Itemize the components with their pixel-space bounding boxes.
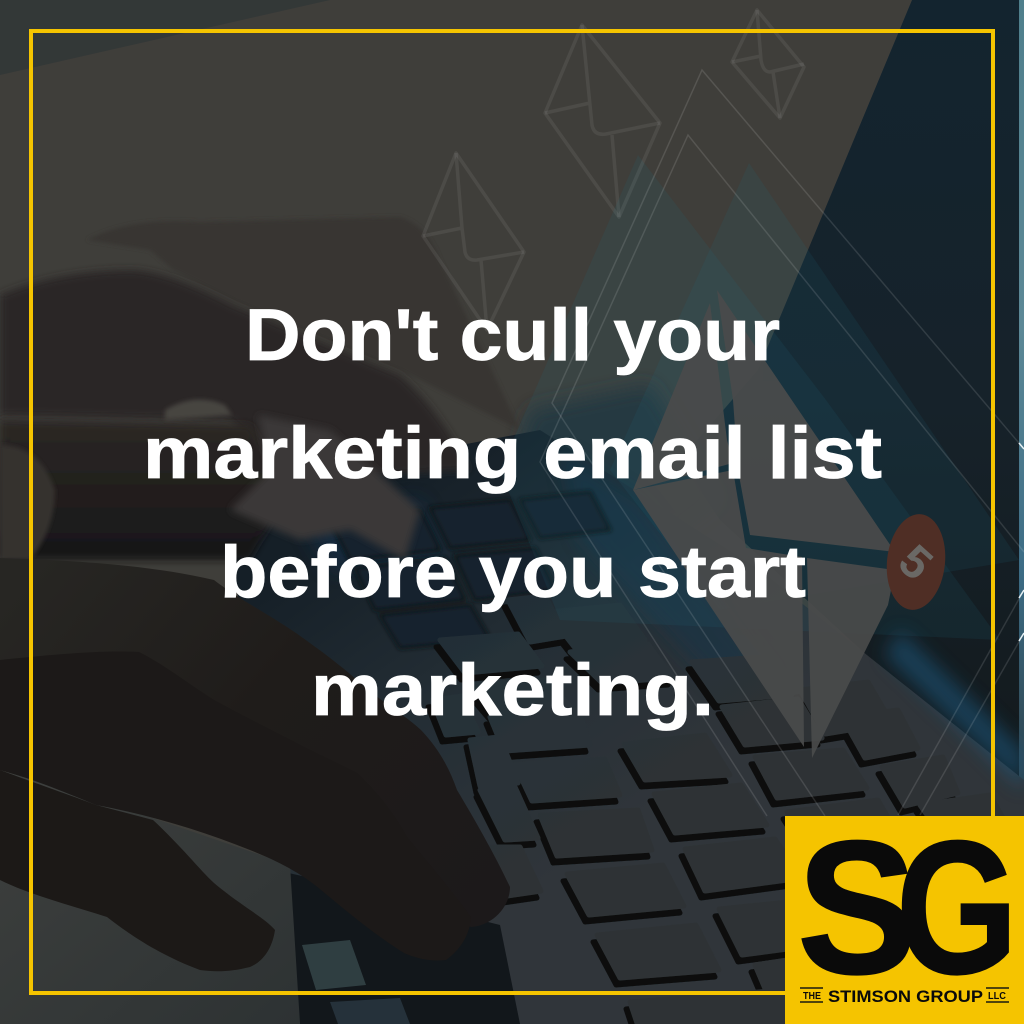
badge number: 5 — [889, 534, 943, 590]
hand: third finger — [0, 770, 275, 971]
background: right edge strip — [1019, 0, 1024, 816]
knuckle highlight — [165, 400, 232, 420]
white strip glints — [1019, 443, 1024, 641]
hand: first finger — [0, 558, 510, 927]
headline line 3: before you start — [220, 532, 806, 613]
upper dim keys — [330, 492, 610, 648]
hand back brown — [0, 270, 470, 480]
teal triangle left — [500, 155, 1000, 640]
keyboard deck — [225, 430, 1024, 1024]
logo monogram — [797, 802, 1018, 1014]
wordmark THE: THE — [803, 991, 821, 1002]
blue keyboard glow — [300, 450, 1024, 790]
headline — [143, 295, 882, 731]
logo rule lines — [800, 988, 1009, 1002]
large grey envelope — [633, 290, 895, 758]
envelope outline right — [732, 10, 804, 118]
wordmark name: STIMSON GROUP — [828, 987, 983, 1006]
inner outline — [540, 135, 1024, 816]
background: top left navy corner — [0, 0, 330, 75]
logo wordmark — [803, 987, 1006, 1006]
outline envelopes — [423, 10, 804, 330]
lower left desk surface — [0, 770, 300, 1024]
keyboard keys — [432, 596, 1010, 1024]
outer outline — [552, 70, 1024, 816]
keyboard photo — [225, 430, 1024, 1024]
envelope lower right body — [807, 558, 895, 758]
hand upper band — [87, 217, 520, 430]
monogram S: S — [797, 802, 917, 1014]
hand: second finger — [0, 652, 471, 961]
hand lower dark — [0, 420, 290, 560]
background: dark patch behind text — [500, 385, 720, 560]
lower right lines — [898, 590, 1024, 815]
thumb lump — [0, 445, 55, 560]
logo background — [785, 816, 1024, 1024]
graphic: teal triangles — [500, 155, 1019, 640]
headline line 4: marketing. — [311, 650, 714, 731]
envelope lower left body — [633, 470, 804, 747]
thin outline triangles — [540, 70, 1024, 816]
envelope outline center — [545, 25, 660, 217]
envelope upper right flap — [717, 290, 895, 552]
envelope upper left flap — [633, 303, 733, 490]
teal key — [302, 940, 366, 990]
teal triangle right — [610, 163, 1019, 610]
background: dark navy wedge — [680, 0, 1024, 800]
logo: The Stimson Group LLC — [785, 802, 1024, 1024]
key near bottom — [330, 998, 410, 1024]
badge circle — [882, 511, 950, 613]
headline line 1: Don't cull your — [245, 295, 780, 376]
keys under fingertips — [275, 870, 520, 1024]
wordmark LLC: LLC — [988, 991, 1006, 1002]
envelope outline left — [423, 153, 524, 330]
fingers light patches — [230, 415, 420, 560]
headline line 2: marketing email list — [143, 413, 882, 494]
red badge with number — [882, 511, 950, 613]
